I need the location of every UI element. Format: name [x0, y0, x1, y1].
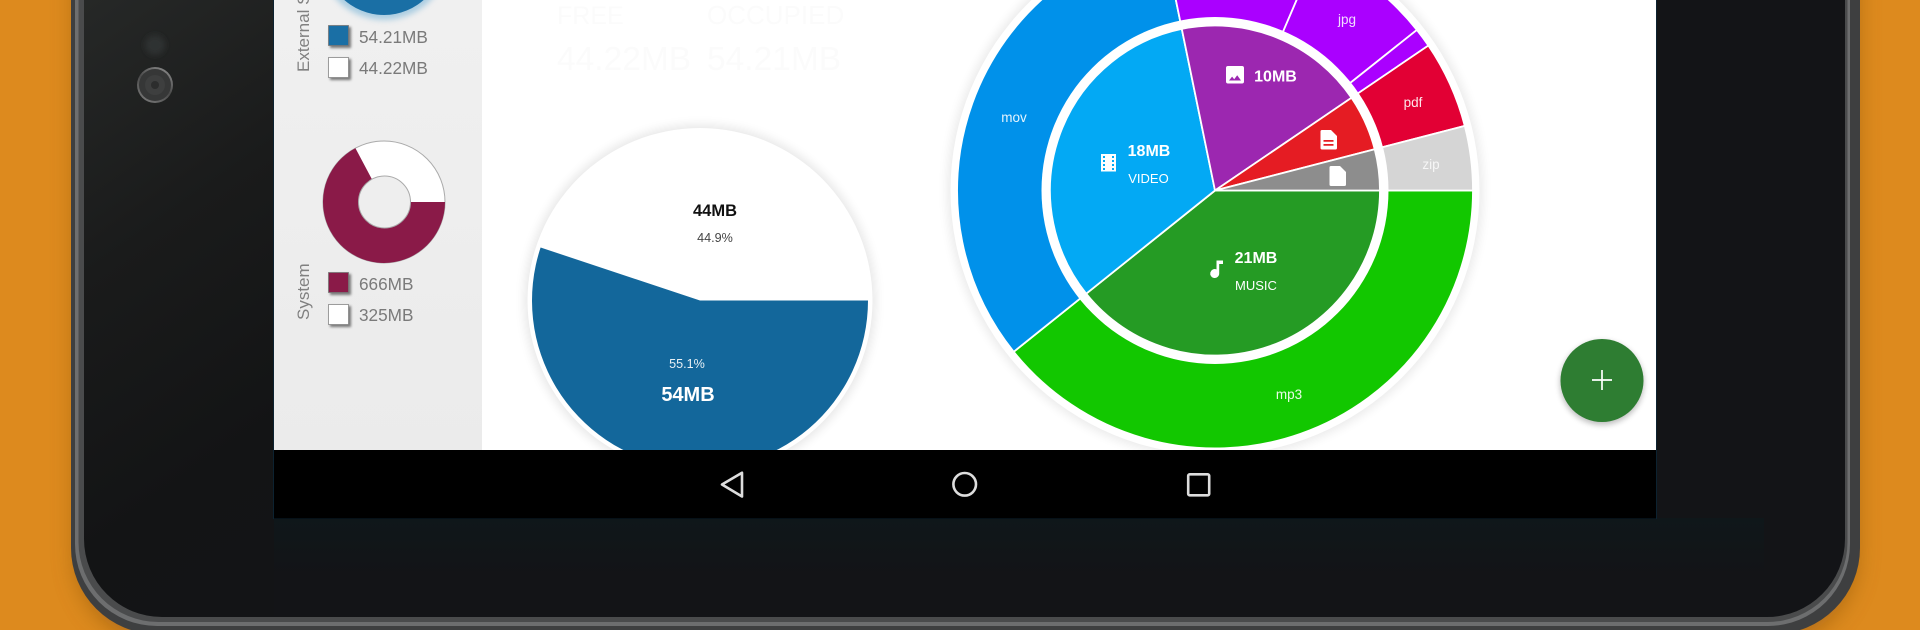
label: 44MB: 44MB: [693, 202, 737, 220]
icon: file: [1330, 166, 1346, 186]
faded header text: 44.22MB: [557, 41, 691, 78]
faded header text: FREE: [557, 2, 624, 30]
icon: image: [1226, 66, 1244, 84]
label: 10MB: 10MB: [1254, 68, 1297, 86]
icon: front camera lens: [137, 67, 173, 103]
label: pdf: pdf: [1404, 95, 1423, 110]
legend swatch: free system: [328, 304, 351, 327]
legend swatch: free external: [328, 58, 351, 80]
legend value: 44.22MB: 44.22MB: [359, 58, 428, 78]
icon: back: [722, 473, 742, 496]
chart: free vs occupied pie: [524, 124, 876, 476]
panel: main content white: [274, 0, 1656, 450]
legend swatch: occupied external: [328, 26, 351, 48]
ring separator: [1042, 17, 1388, 364]
icon: music note: [1210, 260, 1223, 278]
label: System: System: [294, 263, 313, 320]
chart: system donut: [323, 141, 445, 263]
label: mp3: mp3: [1276, 387, 1302, 402]
label: 18MB: 18MB: [1128, 143, 1170, 160]
icon: front sensor: [145, 35, 165, 55]
chart: file type sunburst: [947, 0, 1483, 458]
label: 55.1%: 55.1%: [669, 357, 705, 371]
label: MUSIC: MUSIC: [1235, 278, 1277, 293]
faded header text: OCCUPIED: [707, 0, 844, 30]
legend value: 325MB: 325MB: [359, 305, 413, 325]
panel: sidebar storage list: [274, 0, 482, 450]
label: zip: zip: [1422, 157, 1440, 172]
chart: external storage donut: [319, 0, 449, 20]
label: mov: mov: [1001, 110, 1027, 125]
label: 54MB: 54MB: [661, 384, 715, 406]
icon: film: [1101, 154, 1116, 172]
icon: home: [953, 473, 976, 496]
label: 44.9%: 44.9%: [697, 231, 733, 245]
button: add: [1560, 339, 1644, 425]
label: jpg: jpg: [1337, 12, 1356, 27]
label: VIDEO: VIDEO: [1128, 171, 1169, 186]
faded header text: [557, 0, 844, 78]
icon: plus: [1592, 370, 1612, 390]
screen: [273, 0, 1657, 519]
legend swatch: used system: [328, 272, 351, 295]
bezel area under the screen: [274, 518, 1764, 616]
icon: document: [1320, 130, 1337, 150]
outer ring slices: [957, 0, 1473, 448]
faded header text: 54.21MB: [707, 41, 841, 78]
label: 21MB: 21MB: [1235, 250, 1277, 267]
legend value: 54.21MB: 54.21MB: [359, 27, 428, 47]
legend value: 666MB: 666MB: [359, 274, 413, 294]
navigation bar: [274, 450, 1656, 518]
icon: recents: [1188, 474, 1209, 495]
inner ring slices: [1050, 26, 1380, 356]
